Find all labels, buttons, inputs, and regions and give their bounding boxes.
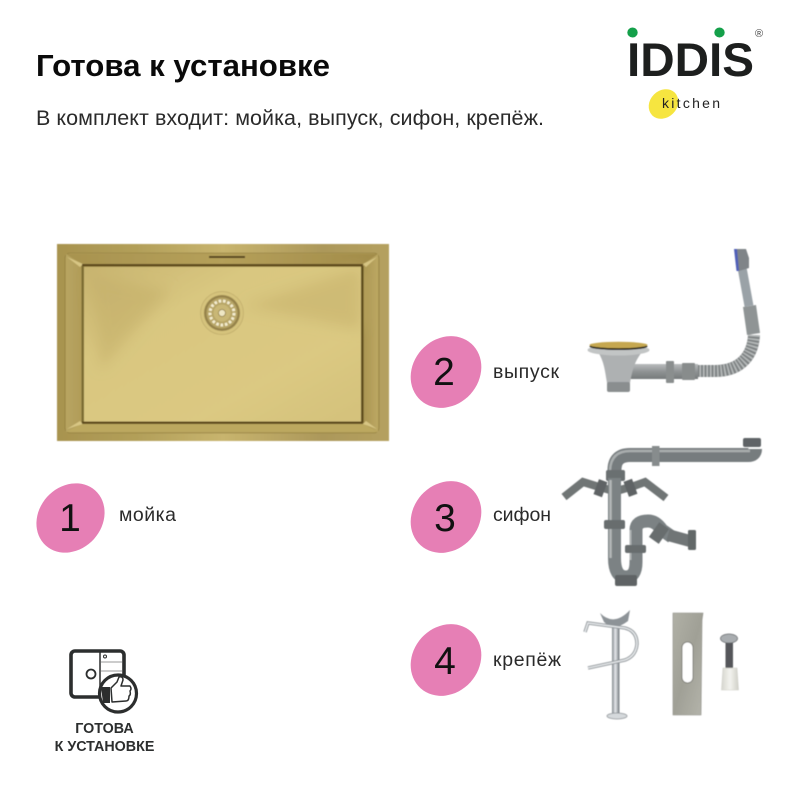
icon caption: К УСТАНОВКЕ: [55, 739, 154, 755]
badge 2: 2: [433, 351, 455, 394]
side branches: [564, 482, 610, 497]
vertical pipe + U bend: [614, 478, 672, 577]
plate: [673, 613, 703, 715]
logo: IDDIS kitchen: IDDIS: [627, 34, 754, 87]
logo: IDDIS kitchen: ®: [755, 28, 763, 40]
subtitle: В комплект входит: мойка, выпуск, сифон, крепёж.: [36, 106, 544, 130]
panel: sink: [57, 244, 389, 441]
drain: [200, 292, 244, 334]
label: выпуск: выпуск: [493, 361, 559, 383]
top pipe: [614, 449, 755, 480]
outlet body: [630, 364, 698, 379]
product: fasteners: [585, 610, 738, 719]
badge 4: 4: [434, 640, 456, 683]
badge 2: [396, 322, 496, 422]
badge 3: [396, 467, 496, 567]
badge 1: [22, 469, 119, 567]
product: siphon: [564, 438, 761, 586]
icon caption: ГОТОВА: [75, 721, 134, 737]
badge 1: 1: [59, 497, 81, 540]
product: drain outlet: [588, 249, 760, 392]
label: крепёж: крепёж: [493, 649, 561, 671]
flexible hose: [696, 335, 754, 371]
icon: ready to install: [71, 651, 136, 712]
label: мойка: мойка: [119, 504, 176, 526]
logo: IDDIS kitchen: kitchen: [662, 95, 720, 111]
logo: IDDIS kitchen: [627, 28, 763, 125]
icon caption: [55, 721, 154, 755]
clamp: [612, 620, 620, 714]
badge 3: 3: [434, 497, 456, 540]
label: сифон: сифон: [493, 504, 551, 526]
title: Готова к установке: [36, 48, 330, 83]
screw: [726, 642, 733, 670]
badge 4: [396, 610, 496, 710]
